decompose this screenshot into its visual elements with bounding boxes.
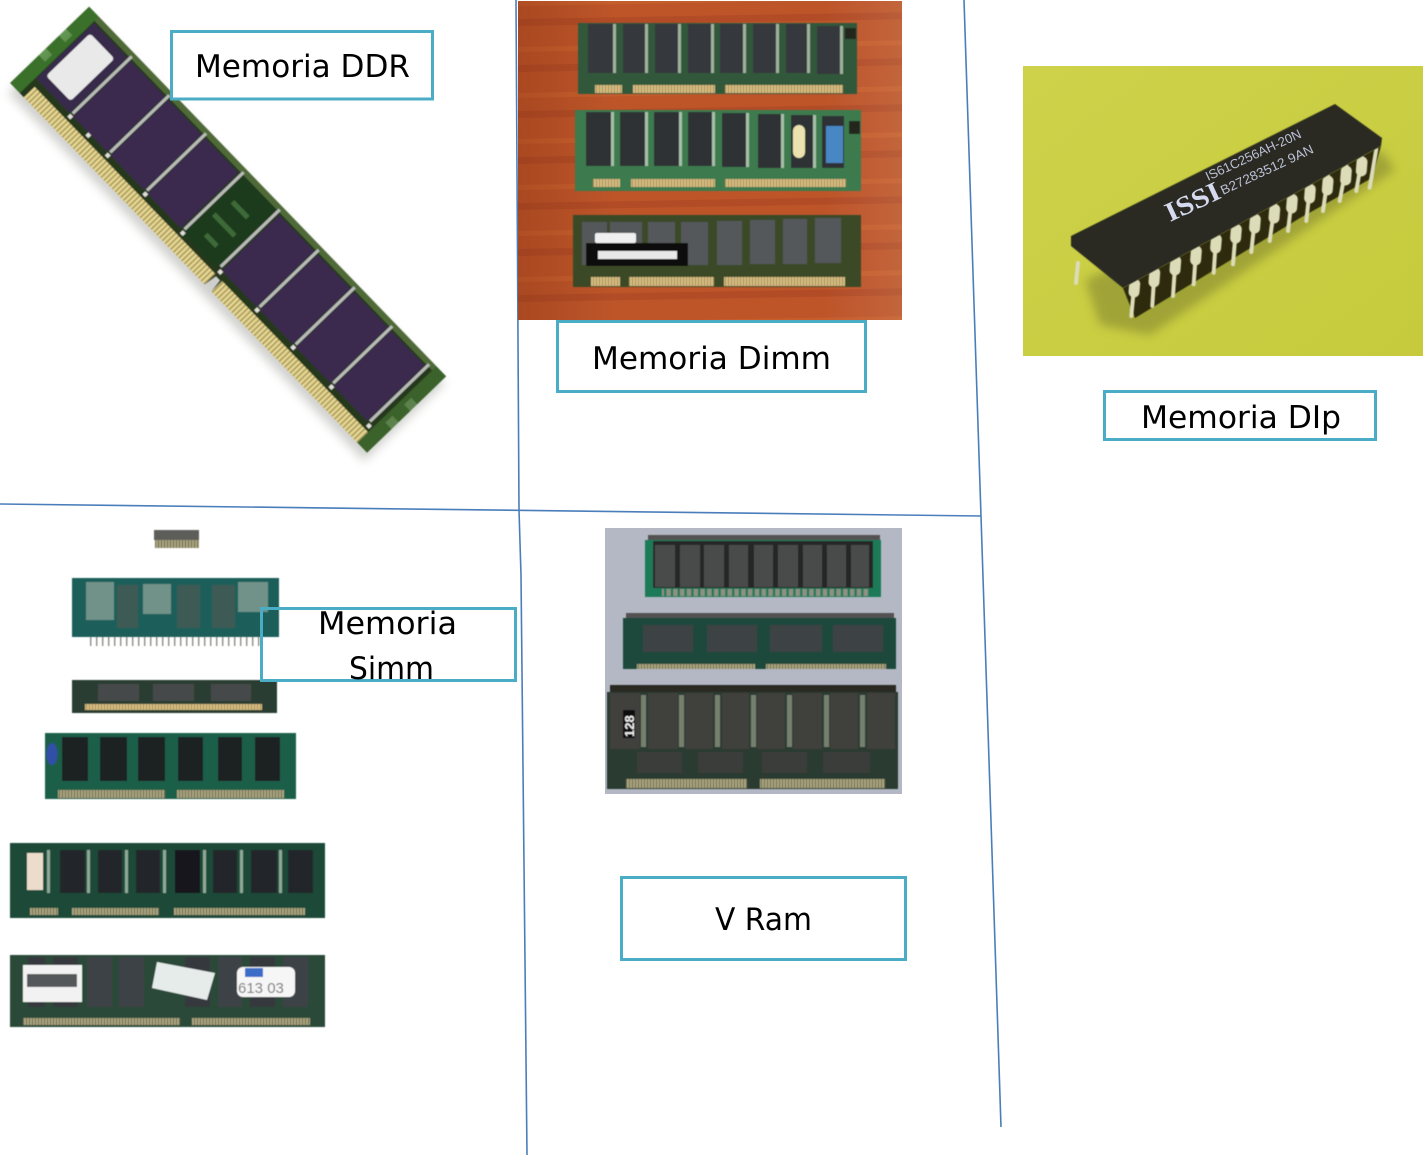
label: Memoria DIp: Memoria DIp	[1141, 400, 1341, 436]
chip underside	[1123, 146, 1381, 318]
label: Memoria Dimm	[558, 322, 866, 392]
small chip	[154, 530, 199, 548]
module 5	[10, 955, 325, 1027]
label: Memoria Simm	[262, 606, 516, 687]
photo: VRAM modules	[605, 528, 902, 794]
photo: SIMM memory modules	[10, 530, 325, 1027]
label: Memoria DDR: Memoria DDR	[195, 49, 410, 85]
module 2	[72, 680, 277, 713]
module 3	[607, 685, 898, 789]
chip body	[1071, 104, 1382, 288]
photo: DDR memory module	[4, 7, 449, 461]
chip marking: ISSI	[1160, 176, 1225, 227]
label: Memoria DDR	[172, 32, 432, 99]
chip pins	[1076, 149, 1376, 316]
label: Memoria Simm: Simm	[349, 651, 434, 687]
module 5: 613 03	[238, 980, 284, 997]
label: V Ram: V Ram	[715, 902, 812, 938]
module 1	[578, 23, 857, 94]
label: Memoria Simm: Memoria	[318, 606, 457, 642]
module 1	[72, 578, 279, 646]
label: V Ram	[622, 878, 906, 960]
module 4	[10, 843, 325, 918]
chip shadow	[1085, 150, 1395, 335]
module 3	[573, 215, 861, 287]
module 2	[575, 110, 861, 191]
module 3: 128	[622, 715, 637, 737]
divider lines	[0, 0, 1001, 1155]
photo: DIP memory chip	[1023, 66, 1423, 356]
chip marking: IS61C256AH-20N	[1203, 126, 1304, 184]
module 2	[623, 613, 896, 669]
module 1	[645, 535, 881, 597]
module 3	[45, 733, 296, 799]
label: Memoria DIp	[1104, 392, 1376, 440]
chip marking	[1160, 126, 1316, 227]
label: Memoria Dimm: Memoria Dimm	[592, 341, 831, 377]
photo: DIMM memory modules on wood	[518, 1, 902, 320]
chip marking: B27283512 9AN	[1218, 141, 1316, 198]
